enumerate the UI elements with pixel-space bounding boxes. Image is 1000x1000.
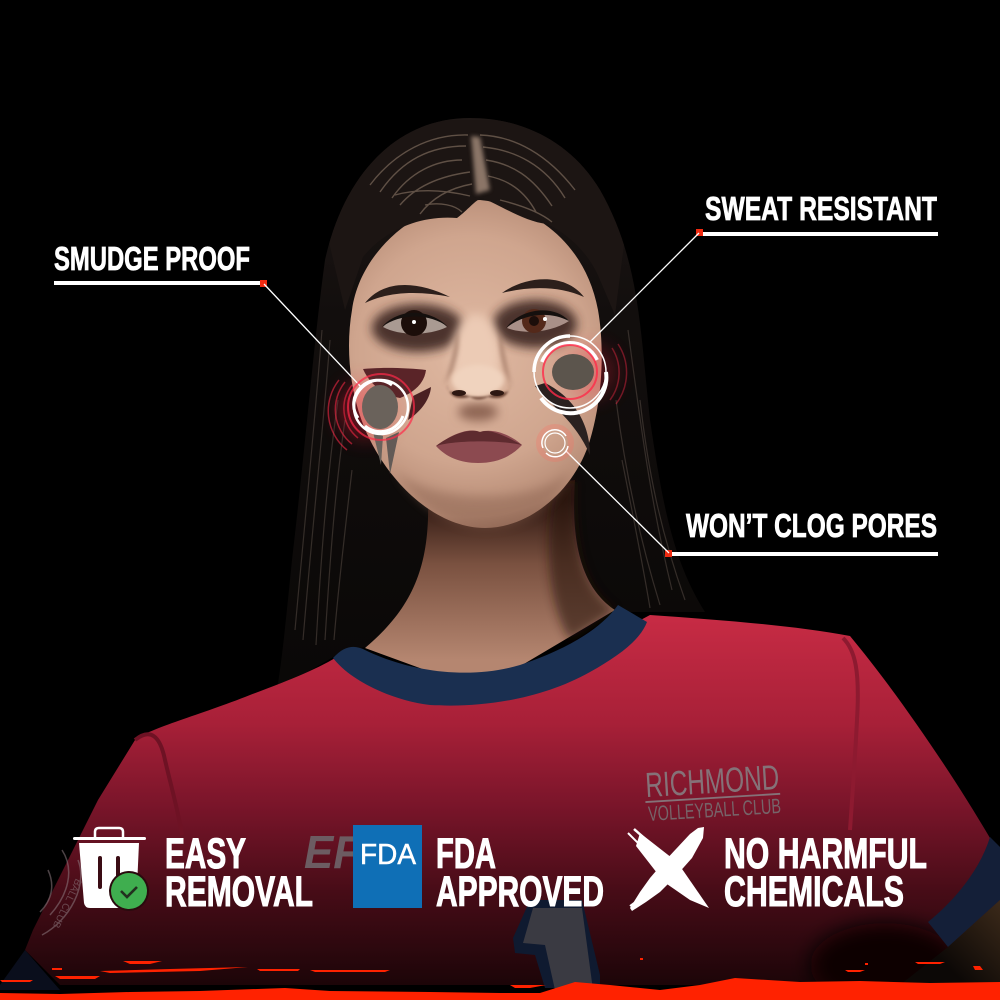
hair [277, 118, 705, 690]
feature: no harmful chemicals: CHEMICALS [724, 868, 904, 916]
feature: FDA approved [353, 825, 604, 916]
logo: Richmond Volleyball Club: RICHMOND [644, 758, 780, 805]
icon: trash can [73, 828, 149, 911]
face paint: left cheek [328, 368, 431, 474]
icon: FDA logo: FDA [360, 839, 417, 871]
sleeve crest: BALL CLUB [50, 877, 83, 930]
sleeve crest [40, 850, 83, 935]
shirt [0, 615, 1000, 1000]
face paint: right cheek [535, 344, 627, 455]
feature: no harmful chemicals [628, 827, 927, 916]
feature: easy removal [73, 828, 313, 916]
eye sockets [372, 304, 464, 352]
callout: sweat resistant [534, 190, 938, 413]
nose [444, 330, 512, 421]
neck [365, 480, 615, 690]
callout: smudge proof: SMUDGE PROOF [54, 240, 250, 277]
collar [333, 605, 647, 706]
orange-red torn band [0, 958, 1000, 1000]
hair at forehead [340, 134, 618, 314]
eyes [383, 314, 447, 334]
feature: easy removal: REMOVAL [165, 868, 313, 916]
logo: Richmond Volleyball Club: VOLLEYBALL CLUB [647, 795, 782, 826]
jersey number 1 [513, 900, 600, 990]
logo: Richmond Volleyball Club [643, 758, 782, 826]
feature: FDA approved: FDA [436, 830, 496, 878]
logo: EF: EF [304, 826, 362, 878]
callout: won't clog pores [539, 427, 938, 557]
icon: FDA logo [353, 825, 422, 908]
feature: FDA approved: APPROVED [436, 868, 604, 916]
feature: easy removal: EASY [165, 830, 246, 878]
chin shadow [395, 470, 570, 528]
lips [436, 431, 522, 463]
face [340, 134, 618, 530]
callout: smudge proof [54, 240, 414, 440]
icon: brush X [628, 827, 709, 911]
eyebrows [365, 285, 450, 303]
